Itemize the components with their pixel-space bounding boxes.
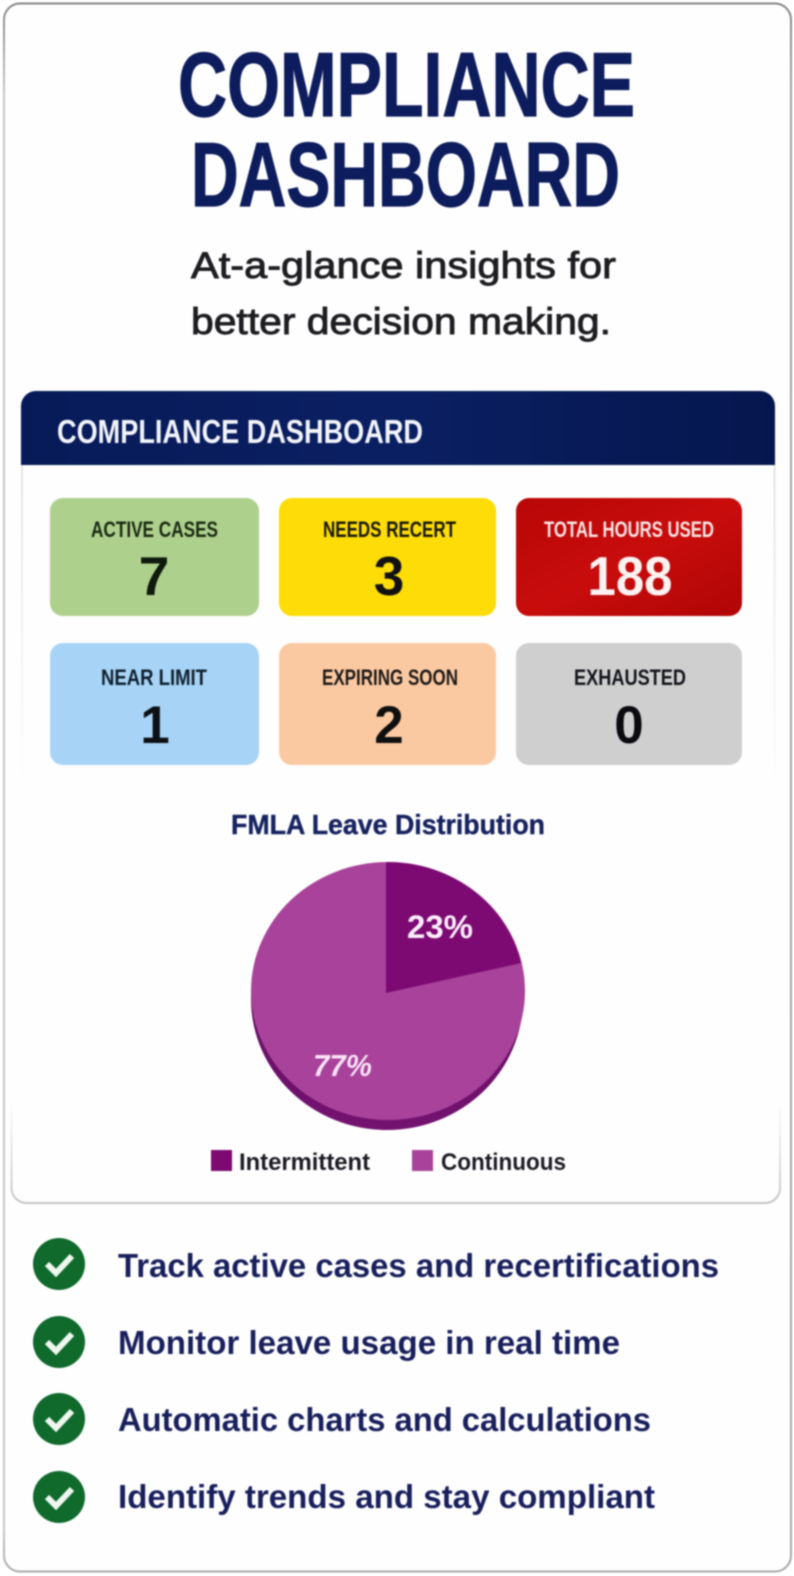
card: active cases: ACTIVE CASES <box>91 517 218 542</box>
chart heading: FMLA Leave Distribution <box>231 809 545 840</box>
subtitle: At-a-glance insights for <box>191 245 616 286</box>
card: expiring soon: 2 <box>374 696 404 755</box>
item: monitor leave usage: Monitor leave usage in real time <box>118 1324 620 1361</box>
card: total hours used: 188 <box>588 545 672 607</box>
legend: Intermittent <box>239 1149 370 1176</box>
pie depth <box>251 868 523 1130</box>
item: monitor leave usage <box>33 1316 620 1368</box>
item: track active cases: Track active cases and recertifications <box>118 1247 719 1284</box>
item: automatic charts: Automatic charts and calculations <box>118 1401 651 1438</box>
title: COMPLIANCE <box>178 35 635 136</box>
card: exhausted <box>516 643 742 765</box>
value: 23%: 23% <box>407 909 473 945</box>
slice: intermittent <box>386 862 521 993</box>
item: track active cases <box>33 1238 719 1290</box>
card: needs recert: NEEDS RECERT <box>323 517 456 542</box>
card: expiring soon <box>279 643 496 765</box>
card: near limit <box>50 643 259 765</box>
card: exhausted: 0 <box>614 696 644 755</box>
value: 77%: 77% <box>313 1048 372 1083</box>
title: DASHBOARD <box>191 125 620 226</box>
title <box>178 35 635 226</box>
card: exhausted: EXHAUSTED <box>574 665 686 690</box>
item: automatic charts <box>33 1393 651 1445</box>
legend: Continuous <box>441 1149 566 1176</box>
card: expiring soon: EXPIRING SOON <box>322 665 458 690</box>
checklist <box>33 1238 719 1523</box>
panel header <box>21 391 775 465</box>
card: active cases: 7 <box>139 545 169 607</box>
card: total hours used: TOTAL HOURS USED <box>544 517 714 542</box>
subtitle: better decision making. <box>191 301 611 342</box>
card: needs recert <box>279 498 496 616</box>
pie chart <box>251 862 525 1130</box>
card: near limit: 1 <box>140 696 170 755</box>
item: identify trends: Identify trends and stay compliant <box>118 1478 655 1515</box>
card: needs recert: 3 <box>374 545 404 607</box>
panel body <box>12 465 780 1203</box>
card: active cases <box>50 498 259 616</box>
card: near limit: NEAR LIMIT <box>101 665 207 690</box>
legend <box>211 1149 566 1176</box>
panel header: COMPLIANCE DASHBOARD <box>57 413 423 450</box>
card: total hours used <box>516 498 742 616</box>
subtitle <box>191 245 616 342</box>
item: identify trends <box>33 1471 655 1523</box>
panel: compliance dashboard <box>12 391 780 1203</box>
slice: continuous <box>251 862 525 1120</box>
